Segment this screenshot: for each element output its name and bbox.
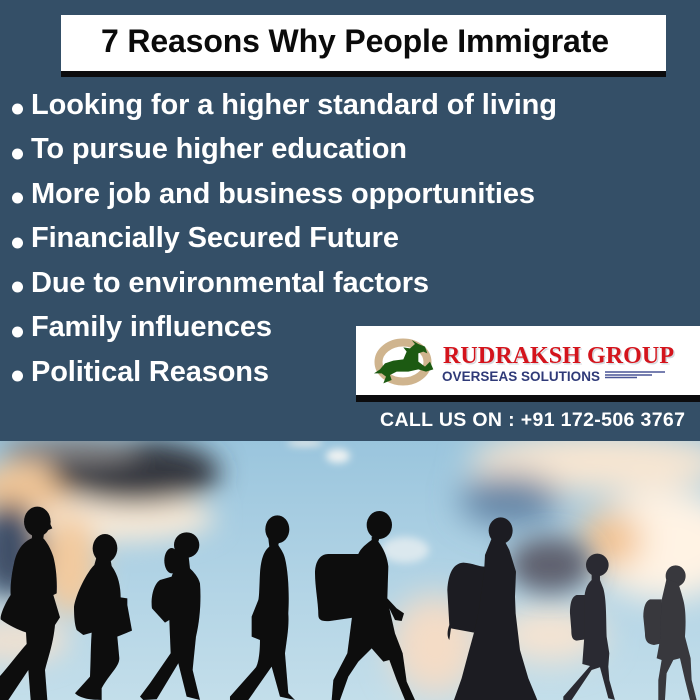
person 6 woman in long robe with backpack xyxy=(447,517,537,700)
person 5 man with large backpack xyxy=(315,511,415,700)
company logo panel: RUDRAKSH GROUP xyxy=(443,343,674,369)
decorative speed lines xyxy=(605,372,665,378)
reason 3: More job and business opportunities xyxy=(31,178,535,210)
person 4 man walking xyxy=(230,515,295,700)
reason 7: Political Reasons xyxy=(31,356,269,388)
person 8 girl with backpack xyxy=(643,565,697,700)
tagline: OVERSEAS SOLUTIONS xyxy=(442,369,600,384)
icon: tan ring with green horse xyxy=(374,340,433,383)
person 7 boy with backpack xyxy=(563,554,615,700)
reason 5: Due to environmental factors xyxy=(31,267,429,299)
reason 4: Financially Secured Future xyxy=(31,222,399,254)
list of seven reasons xyxy=(12,89,557,388)
navy background panel xyxy=(0,0,700,441)
call us phone line: CALL US ON : +91 172-506 3767 xyxy=(380,409,685,431)
sky background xyxy=(0,432,700,700)
title banner xyxy=(61,15,666,77)
person 1 with bag xyxy=(0,507,60,700)
person 3 girl with ponytail xyxy=(140,532,200,700)
title text: 7 Reasons Why People Immigrate xyxy=(101,23,609,59)
sky photo with silhouettes xyxy=(0,432,700,700)
company name: RUDRAKSH GROUP xyxy=(444,344,676,370)
reason 6: Family influences xyxy=(31,311,272,343)
company logo panel xyxy=(356,326,700,402)
reason 2: To pursue higher education xyxy=(31,133,407,165)
silhouettes: left group xyxy=(0,507,295,700)
silhouettes: right group xyxy=(315,511,697,700)
reason 1: Looking for a higher standard of living xyxy=(31,89,557,121)
person 2 with backpack xyxy=(74,534,132,700)
